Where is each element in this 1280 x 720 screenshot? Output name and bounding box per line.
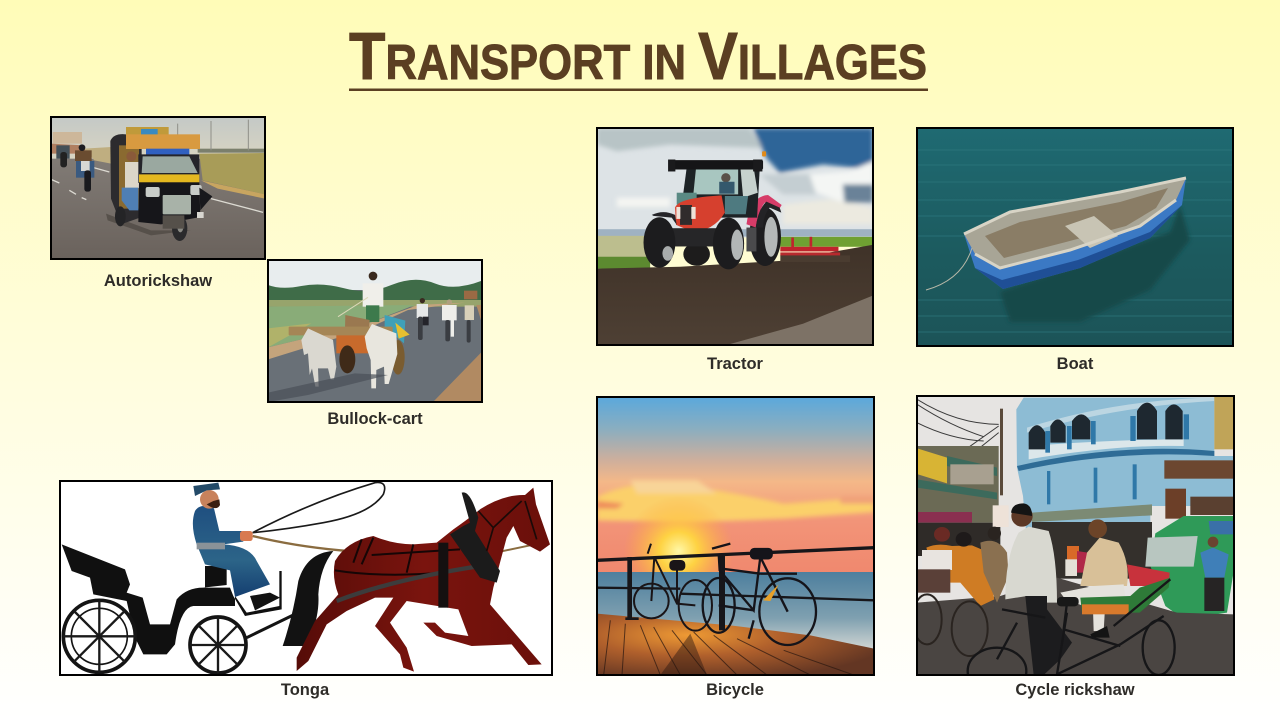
- label: Autorickshaw: Autorickshaw: [104, 272, 212, 290]
- panel: tractor: [597, 128, 873, 373]
- background passengers: [1065, 546, 1088, 576]
- horse: [297, 488, 550, 672]
- harrow: [780, 237, 850, 262]
- label: Tractor: Tractor: [707, 355, 764, 373]
- railing: [597, 548, 874, 630]
- blue building: [1016, 398, 1234, 543]
- photo: boat: [918, 129, 1232, 345]
- photo: cycle rickshaw: [918, 397, 1233, 674]
- photo: tonga: [61, 482, 551, 674]
- road: [917, 578, 1234, 675]
- panel: autorickshaw: [51, 117, 265, 290]
- photo: bullock-cart: [269, 261, 481, 401]
- photo: autorickshaw: [52, 118, 264, 258]
- icon: left bicycle: [634, 544, 712, 631]
- panel: cycle rickshaw: [912, 396, 1234, 699]
- wheels: [63, 600, 246, 673]
- carriage: [62, 544, 282, 654]
- green autorickshaw: [1150, 516, 1234, 619]
- seated passenger: [1080, 538, 1128, 586]
- awning and shop: [1032, 504, 1152, 522]
- wires and pole: [917, 399, 999, 459]
- rickshaw wheels and frame: [968, 579, 1175, 694]
- photo: tractor: [598, 129, 872, 344]
- label: Bullock-cart: Bullock-cart: [327, 410, 423, 428]
- label: Tonga: Tonga: [281, 681, 330, 699]
- fender: [746, 195, 782, 228]
- icon: right bicycle: [703, 544, 816, 645]
- cabin: [680, 168, 760, 218]
- hood: [675, 195, 725, 232]
- rickshaw puller: [1005, 527, 1057, 603]
- collar: [450, 492, 500, 583]
- driver: [193, 506, 270, 597]
- rear wheel: [749, 208, 781, 266]
- panel: bicycle: [597, 397, 874, 699]
- panel: boat: [917, 128, 1233, 373]
- left rickshaw passengers: [917, 527, 1009, 606]
- front wheels: [643, 217, 675, 268]
- label: Boat: Boat: [1057, 355, 1094, 373]
- motorcycles: [56, 144, 94, 192]
- photo: bicycle: [598, 398, 873, 674]
- whip and reins: [253, 482, 385, 533]
- chassis: [660, 228, 717, 246]
- panel: tonga: [60, 481, 552, 699]
- label: Bicycle: Bicycle: [706, 681, 764, 699]
- label: Cycle rickshaw: Cycle rickshaw: [1015, 681, 1135, 699]
- cyclists: [417, 291, 477, 343]
- left shops: [917, 446, 999, 523]
- tail: [283, 551, 333, 646]
- title: TRANSPORT IN VILLAGES: [349, 19, 927, 94]
- panel: bullock-cart: [268, 260, 482, 428]
